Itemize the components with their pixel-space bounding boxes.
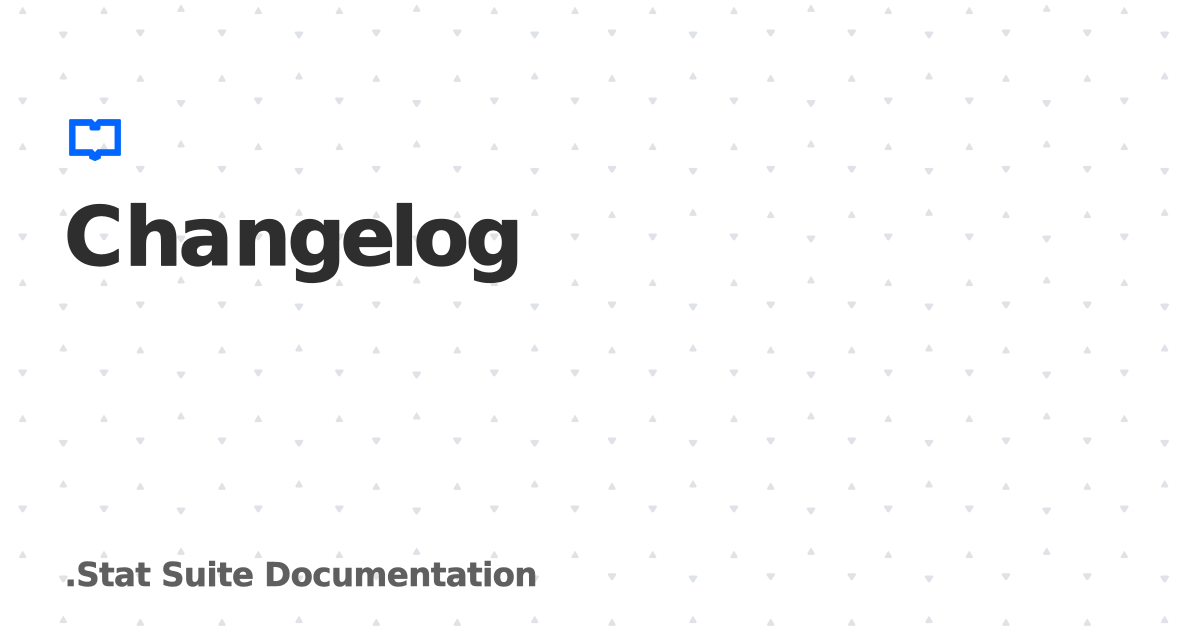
title: Changelog bbox=[64, 191, 523, 285]
icon: blue open book bbox=[69, 119, 121, 161]
subtitle: .Stat Suite Documentation bbox=[64, 556, 538, 594]
